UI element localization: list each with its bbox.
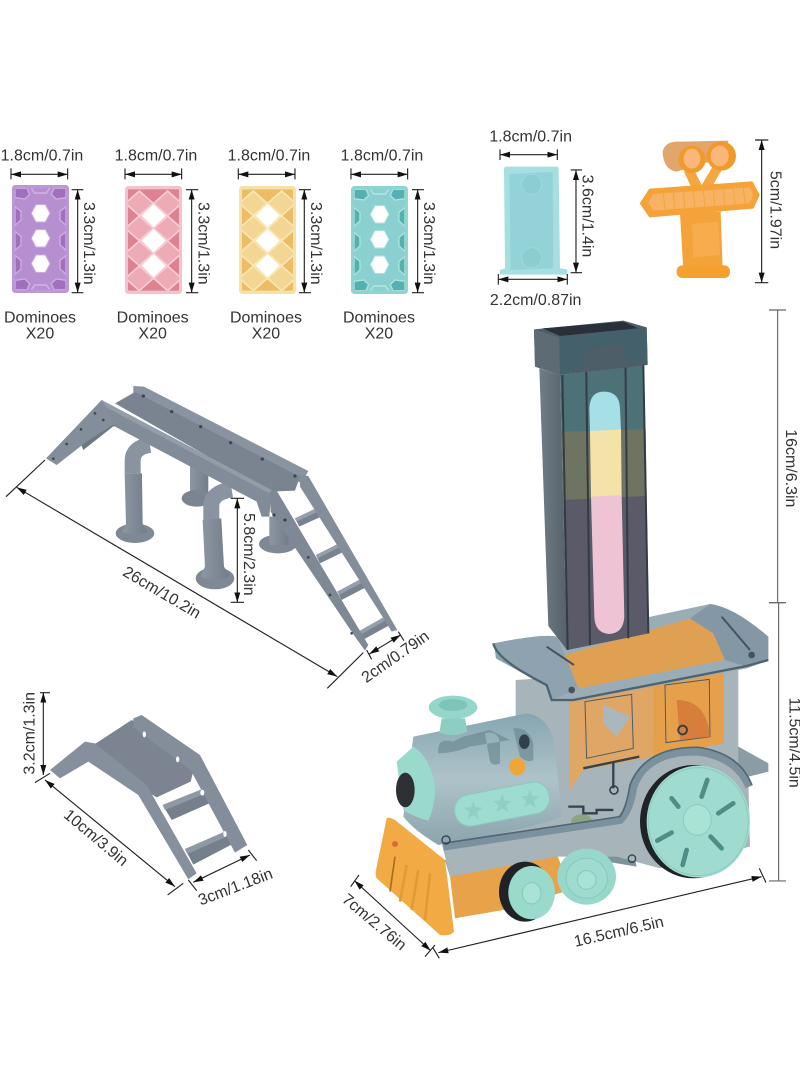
dimensions: launcher: [755, 140, 784, 283]
domino: yellow: 3.3cm/1.3in: [307, 202, 324, 285]
icon: train cabin: [442, 665, 768, 877]
dimensions: bridge: 5.8cm/2.3in: [240, 513, 257, 596]
domino: purple: X20: [26, 325, 54, 342]
dimensions: holder: [489, 129, 595, 309]
icon: bridge left ramp: [46, 400, 115, 465]
panel: four domino colours: [1, 148, 437, 342]
icon: orange launcher: [641, 141, 758, 278]
dimension: train width: 7cm/2.76in: [338, 891, 409, 954]
panel: domino tower: [534, 310, 799, 650]
dimensions: bridge: 2cm/0.79in: [359, 628, 433, 687]
domino: purple: Dominoes: [4, 309, 76, 326]
dimensions: launcher: 5cm/1.97in: [767, 171, 784, 249]
dimensions: short ramp: 3.2cm/1.3in: [21, 692, 38, 775]
domino: purple: 1.8cm/0.7in: [1, 148, 83, 165]
dimension: train height: [769, 603, 800, 881]
dimensions: bridge: 26cm/10.2in: [120, 564, 203, 623]
dimension: train length: [433, 868, 766, 958]
domino: yellow: [228, 148, 324, 342]
domino: pink: Dominoes: [117, 309, 189, 326]
domino: pink: 3.3cm/1.3in: [194, 202, 211, 285]
icon: small wheels: [499, 849, 616, 922]
dimension: tower height: 16cm/6.3in: [782, 429, 799, 507]
dimensions: holder: 2.2cm/0.87in: [490, 292, 581, 309]
domino: teal: 3.3cm/1.3in: [420, 202, 437, 285]
icon: train front cap: [396, 747, 435, 821]
icon: train funnel: [429, 696, 477, 735]
icon: cow catcher: [376, 818, 454, 935]
icon: bridge legs: [116, 445, 297, 589]
domino: teal: 1.8cm/0.7in: [341, 148, 423, 165]
icon: bridge ladder: [270, 475, 397, 651]
dimensions: short ramp: 10cm/3.9in: [60, 807, 131, 870]
panel: short ramp: [21, 692, 275, 909]
domino: yellow: 1.8cm/0.7in: [228, 148, 310, 165]
domino: teal: X20: [365, 325, 393, 342]
domino: pink: X20: [138, 325, 167, 342]
dimensions: short ramp: [21, 692, 275, 909]
icon: dominoes in tower window: [589, 392, 624, 634]
icon: star plate: [452, 779, 552, 829]
icon: tower body: [534, 321, 649, 650]
icon: train chassis: [445, 838, 637, 918]
dimensions: bridge: [6, 460, 433, 688]
domino: purple: [1, 148, 97, 342]
panel: top right accessories: [489, 129, 784, 309]
dimension: train width: [338, 875, 435, 957]
dimensions: holder: 1.8cm/0.7in: [489, 129, 572, 146]
domino: purple: 3.3cm/1.3in: [80, 202, 97, 285]
domino: teal: [341, 148, 437, 342]
domino: teal: Dominoes: [343, 309, 415, 326]
icon: orange knob: [509, 758, 525, 775]
panel: long bridge: [6, 386, 433, 688]
icon: blue domino holder: [500, 167, 567, 275]
icon: short ramp: [50, 715, 247, 879]
icon: large wheel: [640, 765, 750, 878]
dimension: train length: 16.5cm/6.5in: [572, 914, 665, 951]
domino: pink: 1.8cm/0.7in: [115, 148, 197, 165]
dimensions: short ramp: 3cm/1.18in: [196, 865, 275, 909]
dimensions: holder: 3.6cm/1.4in: [578, 175, 595, 257]
domino: yellow: X20: [252, 325, 280, 342]
domino: yellow: Dominoes: [230, 309, 302, 326]
domino: pink: [115, 148, 211, 342]
icon: train boiler: [403, 713, 752, 862]
icon: train roof: [493, 604, 768, 702]
icon: bridge deck: [100, 386, 308, 517]
dimension: tower height: [769, 310, 799, 603]
panel: train: [338, 603, 800, 958]
